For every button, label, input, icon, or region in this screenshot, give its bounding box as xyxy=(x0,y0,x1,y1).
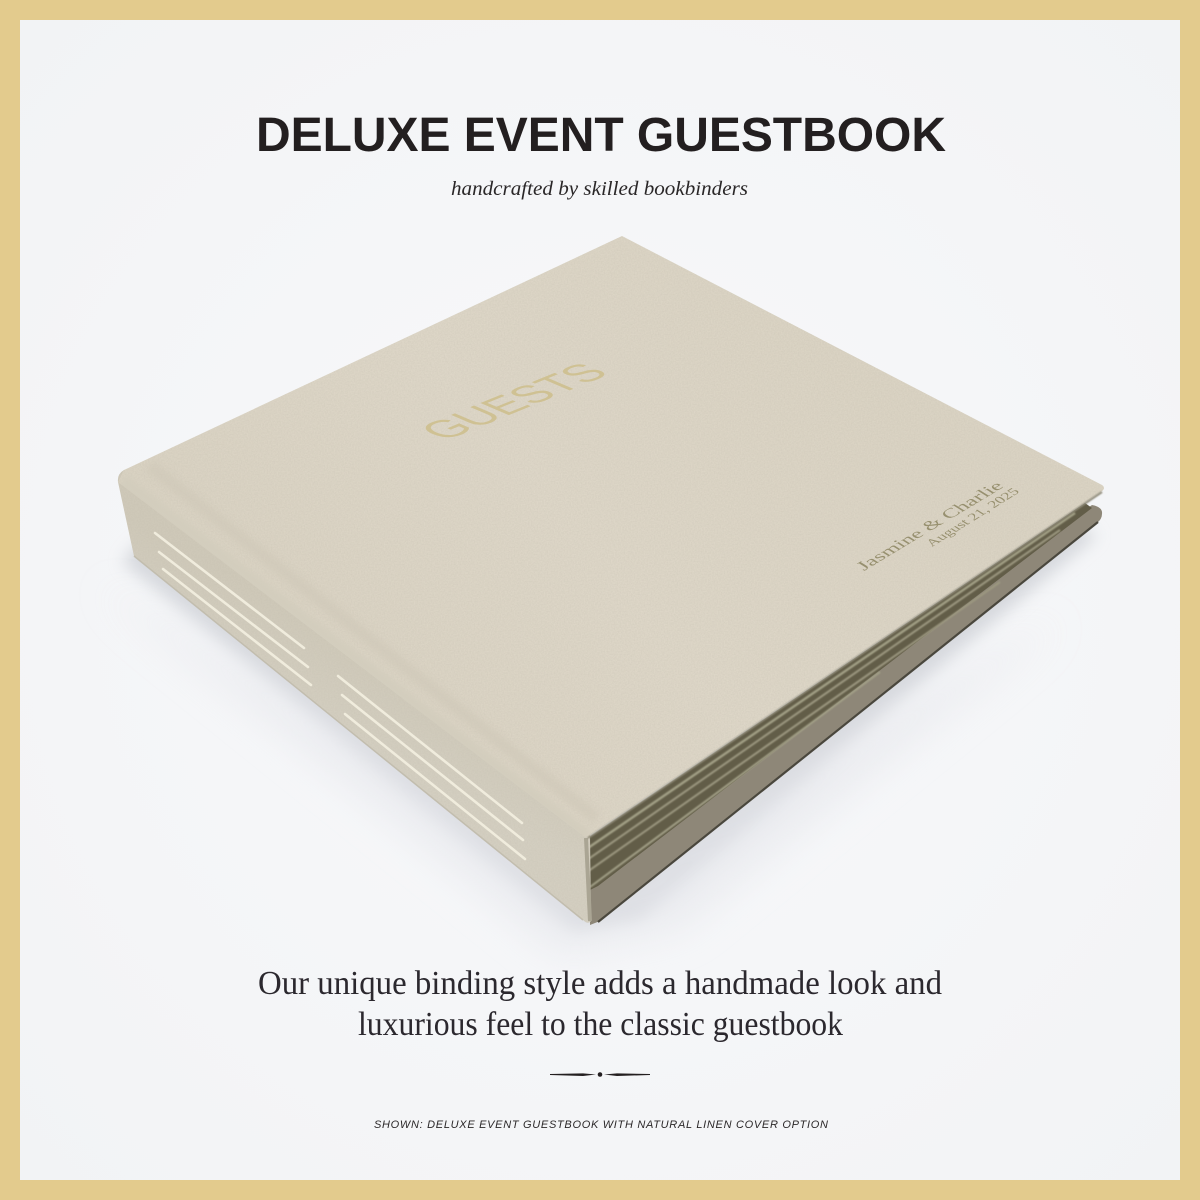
foil title GUESTS: GUESTS xyxy=(409,358,620,445)
title: DELUXE EVENT GUESTBOOK xyxy=(256,109,946,162)
back cover dark edge xyxy=(598,522,1098,922)
shadow under book xyxy=(100,525,1098,955)
spine xyxy=(118,470,591,923)
linen front cover xyxy=(118,236,1104,838)
subtitle: handcrafted by skilled bookbinders xyxy=(451,178,748,200)
caption: SHOWN: DELUXE EVENT GUESTBOOK WITH NATURAL LINEN COVER OPTION xyxy=(374,1119,828,1131)
spine stitching, upper group xyxy=(155,533,311,685)
description text: luxurious feel to the classic guestbook xyxy=(358,1006,843,1043)
description text: Our unique binding style adds a handmade look and xyxy=(258,965,942,1002)
description text xyxy=(258,965,942,1043)
spine stitching, lower group xyxy=(338,676,525,859)
book photo xyxy=(100,236,1104,955)
names deboss: Jasmine & Charlie xyxy=(851,478,1008,573)
back cover xyxy=(590,505,1102,925)
page block xyxy=(587,503,1092,890)
ornament divider xyxy=(550,1072,650,1077)
date deboss: August 21, 2025 xyxy=(922,486,1023,549)
